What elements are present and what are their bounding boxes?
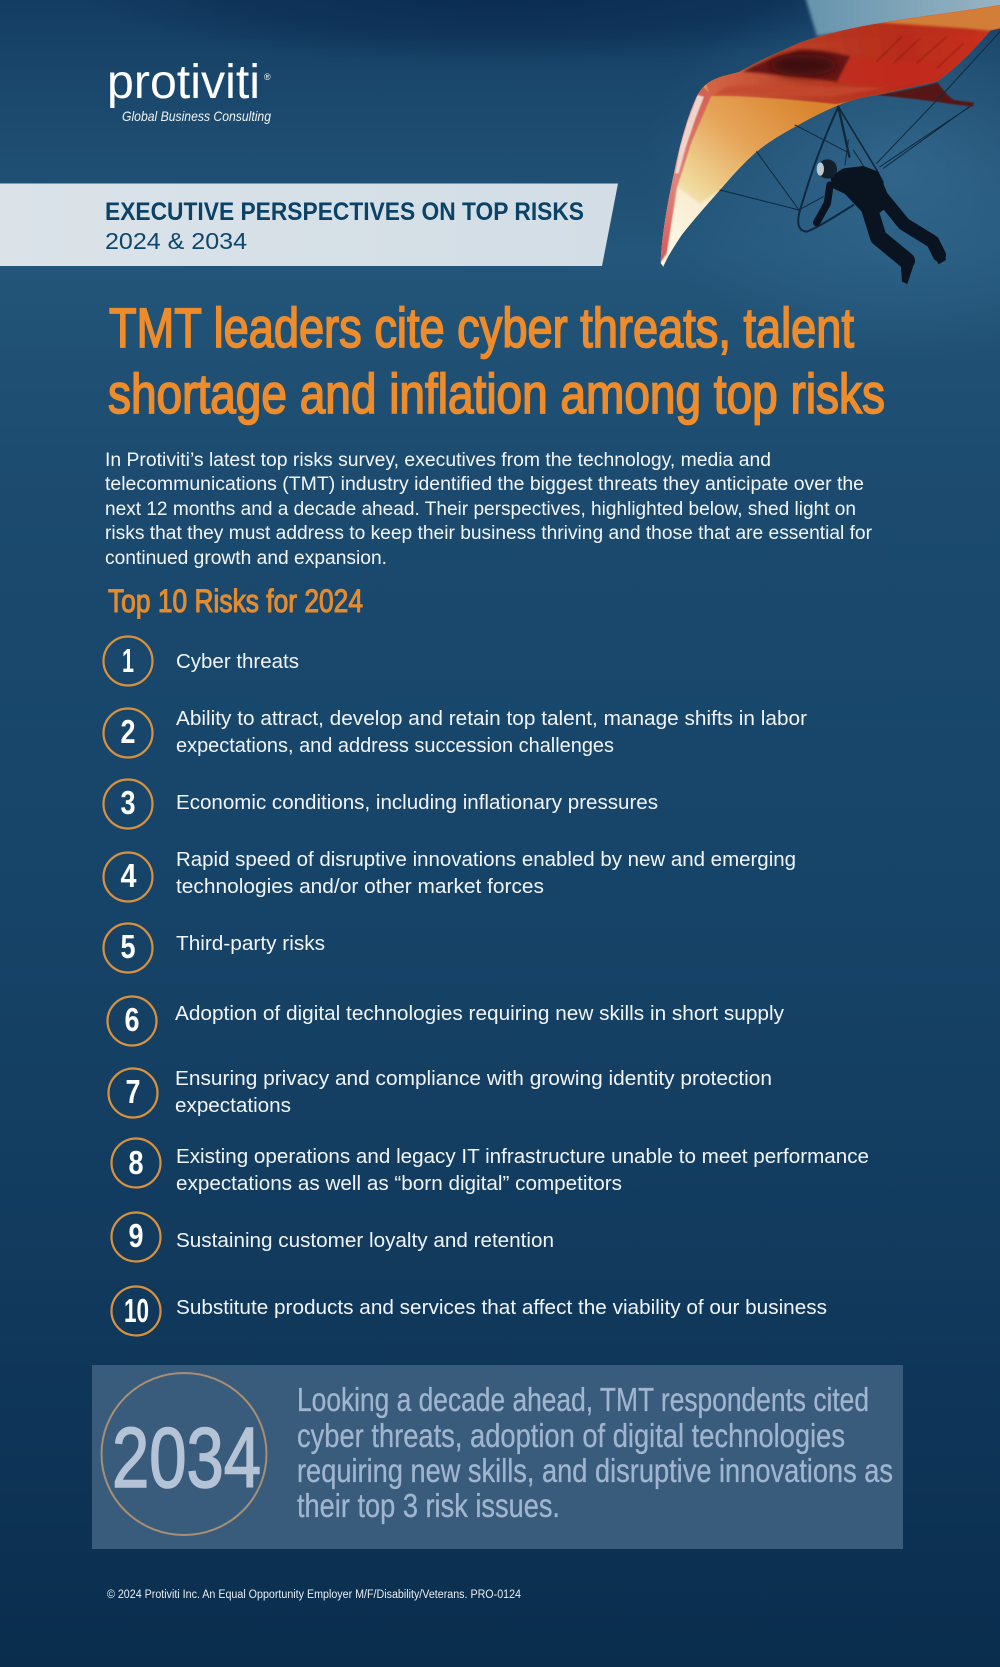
headline: TMT leaders cite cyber threats, talent (109, 297, 854, 359)
risk 9 (112, 1212, 554, 1262)
risk 6 (108, 996, 785, 1046)
risk 9: 9 (128, 1217, 144, 1254)
risk 8: 8 (128, 1144, 144, 1181)
section heading: top 10 risks: Top 10 Risks for 2024 (108, 583, 363, 619)
risk 2 (104, 707, 807, 758)
intro paragraph: telecommunications (TMT) industry identified the biggest threats they anticipate over the (105, 474, 864, 495)
logo: protiviti (107, 56, 260, 109)
rigging cables (720, 32, 1000, 232)
risk 3: Economic conditions, including inflationary pressures (176, 791, 658, 814)
risk 3 (104, 780, 658, 828)
risk list (104, 636, 869, 1336)
risk 10: Substitute products and services that affect the viability of our business (176, 1296, 827, 1319)
risk 10 (112, 1286, 827, 1336)
risk 7: expectations (175, 1094, 291, 1117)
risk 4 (104, 848, 796, 902)
2034 outlook text: their top 3 risk issues. (297, 1488, 560, 1525)
2034 outlook text (297, 1382, 893, 1525)
banner: report title: 2024 & 2034 (105, 228, 247, 254)
risk 2: Ability to attract, develop and retain top talent, manage shifts in labor (176, 707, 807, 730)
headline (108, 297, 885, 425)
intro paragraph: continued growth and expansion. (105, 548, 387, 569)
risk 3: 3 (120, 784, 136, 821)
risk 4: 4 (120, 857, 137, 894)
logo: Global Business Consulting (122, 108, 271, 124)
banner: report title: EXECUTIVE PERSPECTIVES ON TOP RISKS (105, 198, 584, 226)
risk 7: 7 (126, 1073, 140, 1110)
logo: ® (264, 72, 271, 82)
risk 8 (112, 1138, 869, 1195)
intro paragraph: next 12 months and a decade ahead. Their perspectives, highlighted below, shed light on (105, 499, 856, 520)
footer copyright: © 2024 Protiviti Inc. An Equal Opportunity Employer M/F/Disability/Veterans. PRO-0124 (107, 1589, 522, 1601)
2034 outlook text: cyber threats, adoption of digital technologies (297, 1418, 845, 1455)
risk 4: technologies and/or other market forces (176, 875, 544, 898)
risk 9: Sustaining customer loyalty and retention (176, 1229, 554, 1252)
risk 5: Third-party risks (176, 932, 325, 955)
risk 6: Adoption of digital technologies requiring new skills in short supply (175, 1002, 785, 1025)
tail shadow of wing (877, 83, 974, 107)
risk 6: 6 (124, 1001, 140, 1038)
risk 10: 10 (124, 1292, 149, 1329)
risk 1 (104, 636, 299, 686)
panel: 2034 outlook (92, 1365, 903, 1549)
photo: hang glider and pilot (650, 0, 1000, 284)
risk 7 (108, 1067, 772, 1118)
risk 8: Existing operations and legacy IT infrastructure unable to meet performance (176, 1145, 869, 1168)
intro paragraph (105, 450, 873, 569)
glider wing (650, 0, 1000, 273)
risk 5 (104, 924, 325, 972)
risk 2: expectations, and address succession challenges (176, 734, 614, 757)
risk 7: Ensuring privacy and compliance with growing identity protection (175, 1067, 772, 1090)
risk 1: 1 (122, 642, 134, 679)
intro paragraph: In Protiviti’s latest top risks survey, executives from the technology, media and (105, 450, 771, 471)
pilot silhouette (817, 159, 946, 284)
risk 5: 5 (120, 928, 136, 965)
intro paragraph: risks that they must address to keep their business thriving and those that are essential for (105, 523, 873, 544)
2034 circle badge: 2034 (112, 1411, 261, 1506)
risk 2: 2 (120, 713, 136, 750)
risk 8: expectations as well as “born digital” competitors (176, 1172, 622, 1195)
risk 4: Rapid speed of disruptive innovations enabled by new and emerging (176, 848, 796, 871)
risk 1: Cyber threats (176, 650, 299, 673)
2034 circle badge (102, 1373, 266, 1535)
banner: report title (0, 184, 618, 266)
